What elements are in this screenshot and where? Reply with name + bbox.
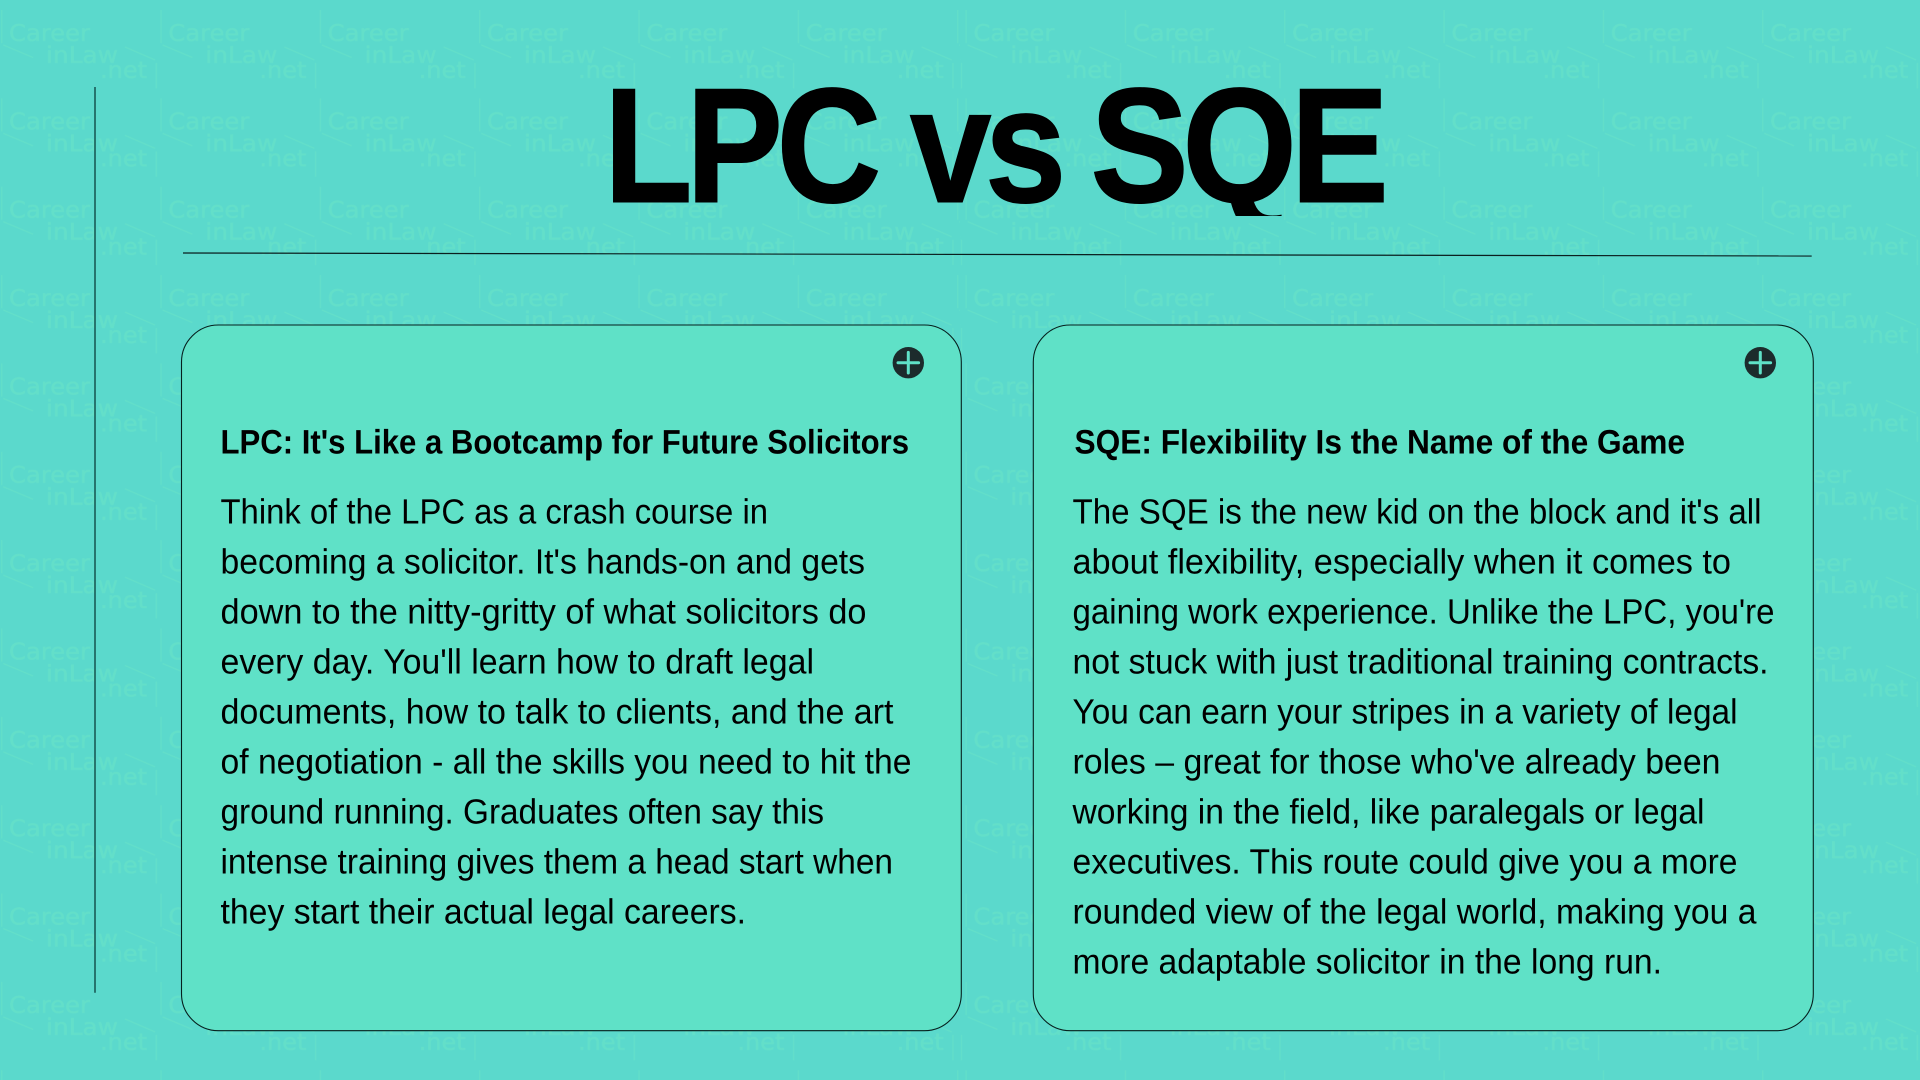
text block: SQE body: You can earn your stripes in a variety of legal (1072, 692, 1738, 731)
text block: SQE body: gaining work experience. Unlike the LPC, you're (1072, 592, 1774, 631)
text block: SQE body: The SQE is the new kid on the block and it's all (1072, 492, 1762, 531)
text block: SQE body: working in the field, like paralegals or legal (1072, 792, 1704, 831)
text block: LPC body: documents, how to talk to clients, and the art (220, 692, 894, 731)
text block: SQE body (1072, 492, 1774, 981)
text block: SQE body: not stuck with just traditional training contracts. (1072, 642, 1768, 681)
text block: LPC body: Think of the LPC as a crash course in (220, 492, 768, 531)
text block: LPC body: ground running. Graduates often say this (220, 792, 824, 831)
text block: SQE body: about flexibility, especially when it comes to (1072, 542, 1731, 581)
vertical rule (94, 87, 96, 993)
text block: SQE body: more adaptable solicitor in the long run. (1072, 942, 1662, 981)
text block: LPC body: becoming a solicitor. It's hands-on and gets (220, 542, 865, 581)
text block: LPC body: down to the nitty-gritty of what solicitors do (220, 592, 866, 631)
text block: LPC body: they start their actual legal careers. (220, 892, 746, 931)
text block: SQE body: executives. This route could give you a more (1072, 842, 1738, 881)
text block: LPC body: of negotiation - all the skills you need to hit the (220, 742, 912, 781)
text block: LPC body: intense training gives them a head start when (220, 842, 893, 881)
text block: LPC body (220, 492, 912, 931)
title: vs (910, 54, 1060, 237)
title: LPC (604, 54, 878, 237)
text block: SQE body: roles – great for those who've already been (1072, 742, 1720, 781)
heading: SQE: SQE: Flexibility Is the Name of the Game (1074, 424, 1685, 462)
panel: SQE (1033, 325, 1813, 1031)
title: SQE (1090, 54, 1384, 237)
text block: LPC body: every day. You'll learn how to draft legal (220, 642, 814, 681)
text block: SQE body: rounded view of the legal world, making you a (1072, 892, 1757, 931)
icon: plus LPC (893, 347, 924, 378)
title underline (183, 253, 1812, 256)
heading: LPC: LPC: It's Like a Bootcamp for Future Solicitors (220, 424, 909, 462)
title (613, 87, 1384, 216)
icon: plus SQE (1745, 347, 1776, 378)
panel: LPC (182, 325, 961, 1031)
